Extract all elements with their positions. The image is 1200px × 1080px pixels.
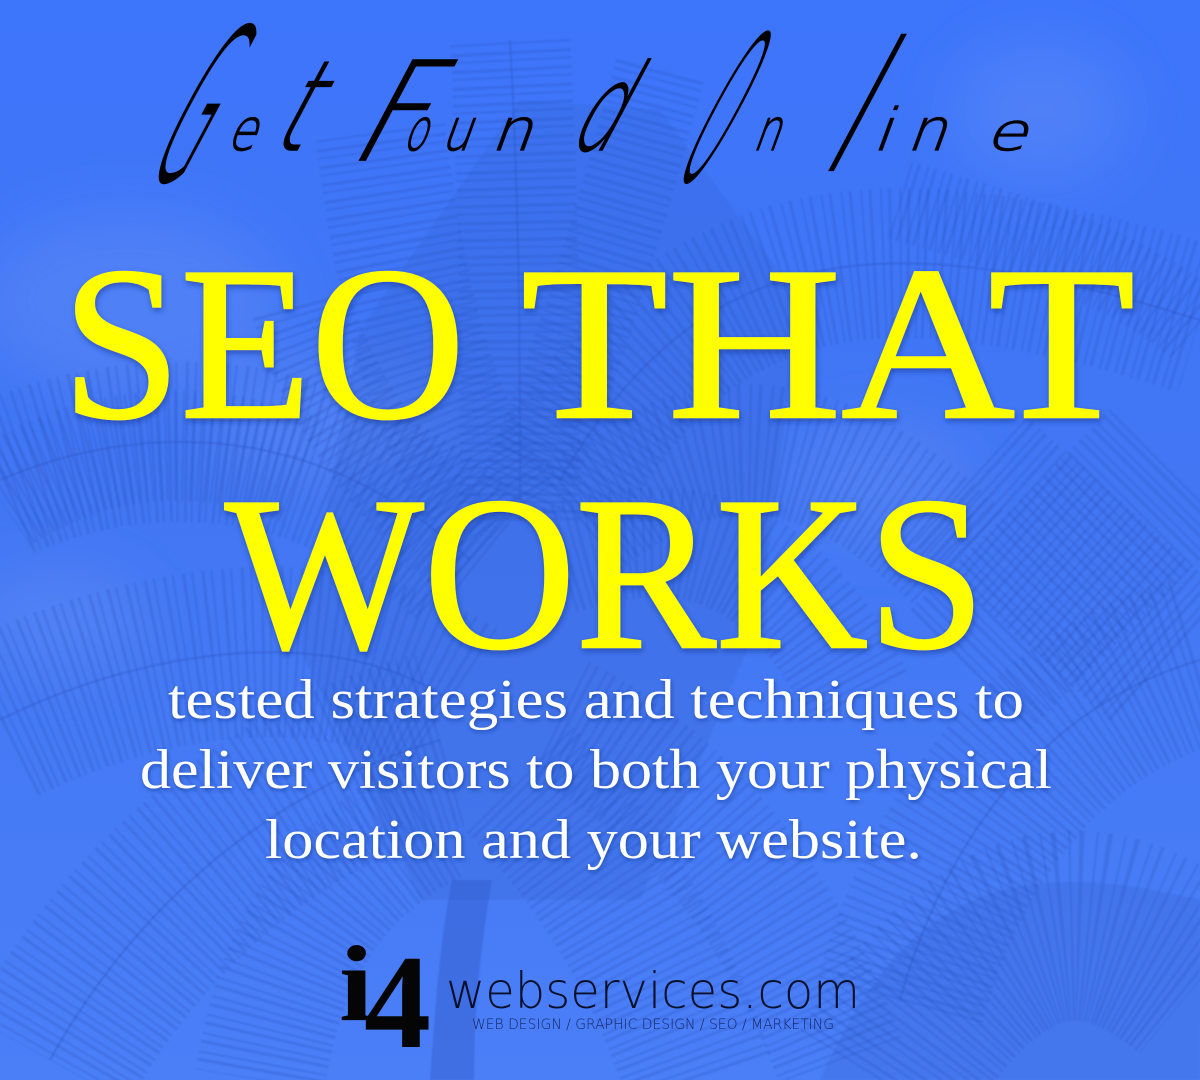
main heading: SEO THAT: SEO: [62, 223, 465, 465]
script heading: n: [901, 97, 964, 164]
palm trunk: [430, 880, 492, 1080]
logo: [339, 924, 860, 1076]
frond: right middle: [560, 449, 960, 700]
frond: top: [510, 40, 660, 520]
script heading: o: [397, 98, 444, 165]
logo mark: i4: i: [339, 924, 374, 1044]
frond: left arch: [0, 442, 470, 560]
main heading: SEO THAT: [62, 223, 1135, 465]
second palm: right: [820, 660, 1200, 1080]
frond: lower left drooping: [50, 740, 440, 1080]
script heading: l: [795, 4, 934, 213]
script heading: n: [485, 96, 550, 164]
script heading: O: [647, 0, 803, 228]
script heading: [116, 0, 1043, 230]
logo tagline: WEB DESIGN / GRAPHIC DESIGN / SEO / MARKETING: [472, 1017, 834, 1033]
script heading: e: [221, 96, 274, 164]
script heading: n: [747, 98, 797, 164]
logo wordmark: webservices.com: [446, 962, 860, 1020]
script heading: d: [550, 39, 670, 179]
script heading: t: [252, 34, 363, 180]
frond: left lower: [0, 652, 450, 720]
script heading: i: [867, 96, 909, 164]
script heading: F: [328, 33, 482, 193]
frond: upper right to edge: [560, 200, 1200, 480]
tree foliage: right: [970, 470, 1170, 670]
script heading: e: [980, 102, 1043, 163]
body text: deliver visitors to both your physical: [140, 739, 1052, 801]
palm crown mass: [300, 100, 800, 900]
main heading: WORKS: WORKS: [225, 453, 985, 695]
frond: lower right: [520, 720, 840, 1080]
body text: [140, 669, 1052, 871]
script heading: u: [435, 96, 489, 164]
body text: location and your website.: [265, 809, 922, 871]
main heading: SEO THAT: THAT: [521, 223, 1135, 465]
frond: upper left: [300, 130, 500, 560]
logo mark: i4: 4: [364, 928, 431, 1076]
body text: tested strategies and techniques to: [168, 669, 1024, 731]
